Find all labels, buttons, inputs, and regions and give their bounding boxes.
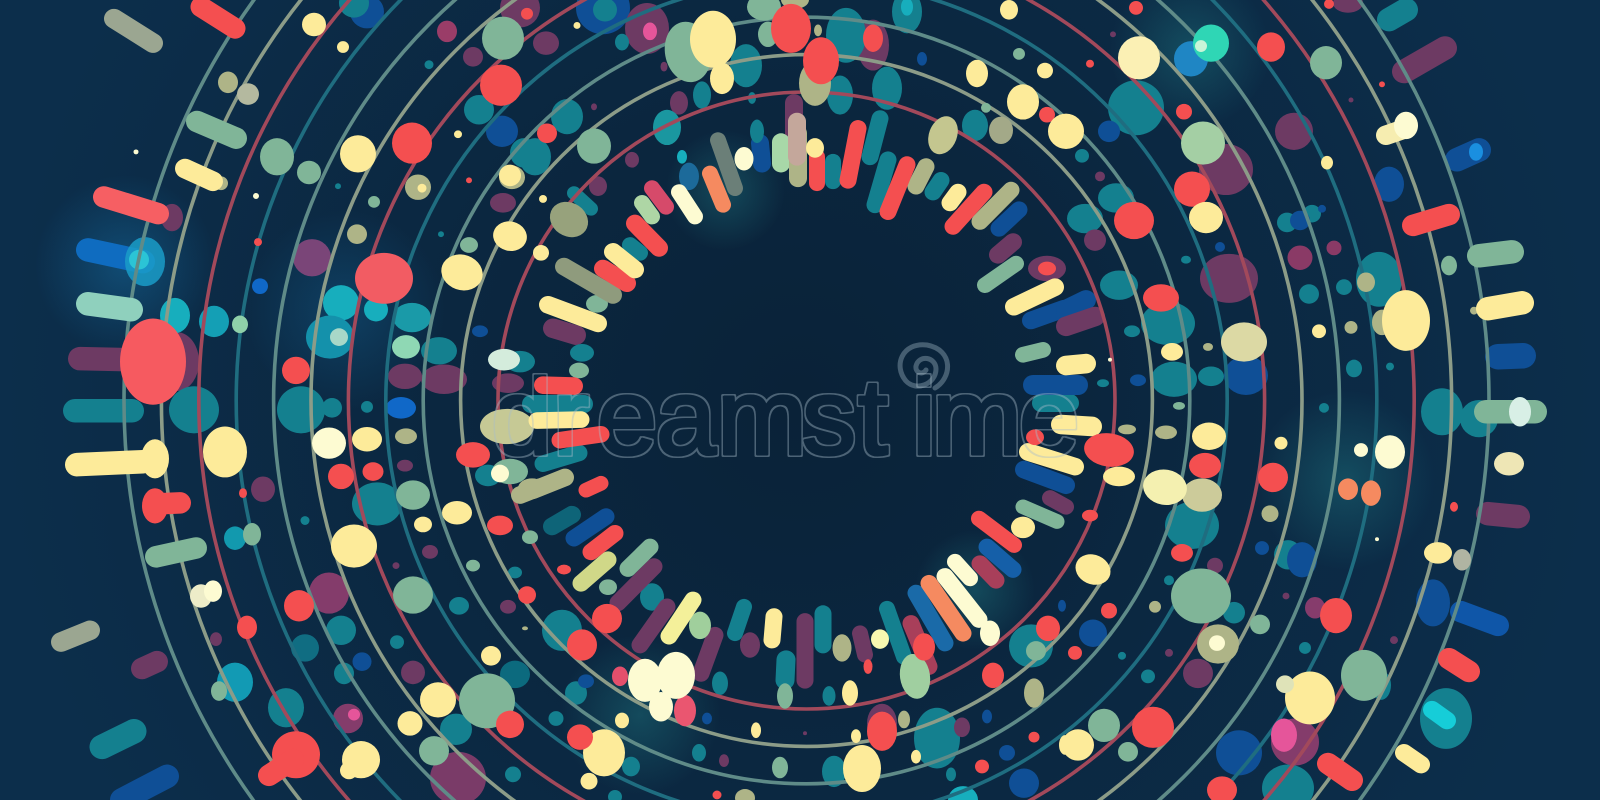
upper-centre warm shapes (533, 0, 1084, 386)
lower-left warm shapes (61, 409, 546, 779)
lower-centre cool shapes (542, 453, 1066, 800)
upper-left cool shapes (80, 0, 540, 394)
upper-centre cool shapes (519, 0, 1066, 362)
dashes near the centre row (531, 385, 1078, 404)
lower-right warm shapes (1062, 397, 1535, 800)
lower-right cool shapes (1079, 388, 1518, 800)
lower-left cool shapes (75, 386, 530, 800)
watermark spiral logo (900, 345, 948, 388)
watermark word: dreamstime (492, 356, 1079, 477)
upper-right cool shapes (1066, 0, 1523, 397)
watermark (492, 345, 1079, 477)
lower-centre warm shapes (520, 420, 1092, 800)
upper-left warm shapes (88, 7, 533, 405)
upper-right warm shapes (1066, 0, 1522, 366)
